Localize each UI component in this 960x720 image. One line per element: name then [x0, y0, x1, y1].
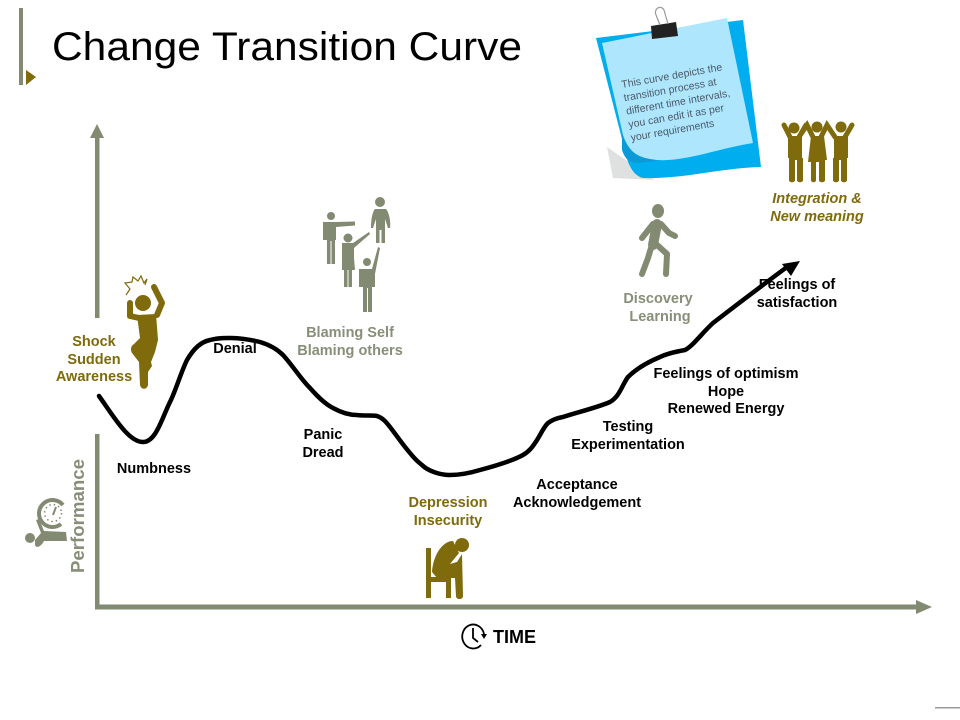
axis label: Performance: Performance: [68, 459, 88, 573]
label: Feelings of optimism: Renewed Energy: [668, 401, 784, 417]
label: Testing: [571, 419, 685, 453]
icon: clock: [462, 624, 487, 648]
label: Blaming: Blaming others: [297, 343, 403, 359]
note shadow: [607, 147, 655, 180]
label: Integration: [770, 191, 864, 225]
label: Depression: Insecurity: [414, 513, 482, 529]
axis label: TIME: TIME: [493, 627, 536, 647]
label: Feelings of satisfaction: [757, 277, 837, 311]
label: Testing: Testing: [603, 419, 653, 435]
label: Feelings of satisfaction: Feelings of: [759, 277, 835, 293]
note text: your requirements: [630, 118, 715, 144]
label: Acceptance: Acknowledgement: [513, 495, 641, 511]
icon: walking person: [642, 204, 675, 274]
note text: different time intervals,: [625, 87, 731, 118]
label: Numbness: Numbness: [117, 461, 191, 477]
label: Discovery: Learning: [629, 309, 691, 325]
label: Discovery: [623, 291, 693, 325]
label: Feelings of satisfaction: satisfaction: [757, 295, 837, 311]
label: Feelings of optimism: Hope: [708, 384, 744, 400]
title accent bar and marker: [19, 8, 36, 85]
label: Shock: Sudden: [67, 352, 121, 368]
label: Feelings of optimism: Feelings of optimism: [653, 366, 799, 382]
note text: [620, 61, 736, 144]
label: Testing: Experimentation: [571, 437, 685, 453]
note back sheet: [596, 20, 761, 178]
label: Panic Dread: [302, 427, 344, 461]
label: Shock: [56, 334, 132, 385]
label: Denial: Denial: [213, 341, 257, 357]
label: Blaming: Blaming Self: [306, 325, 394, 341]
note front sheet: [602, 18, 753, 160]
icon: person with clock: [25, 500, 67, 547]
label: Shock: Shock: [72, 334, 117, 350]
label: Feelings of optimism: [653, 366, 799, 417]
footer mark: [935, 707, 960, 708]
label: Blaming: [297, 325, 403, 359]
vertical axis: [90, 124, 104, 609]
label: Integration: New meaning: [770, 209, 864, 225]
performance curve: [99, 261, 800, 475]
label: Discovery: Discovery: [623, 291, 693, 307]
label: Depression: Depression: [409, 495, 487, 511]
label: Panic Dread: Dread: [302, 445, 344, 461]
icon: blaming people: [323, 197, 390, 312]
note fold shade: [622, 135, 660, 163]
label: Integration: Integration &: [772, 191, 862, 207]
sticky note: [596, 7, 761, 180]
binder clip: [651, 7, 678, 39]
note text: transition process at: [623, 76, 717, 104]
horizontal axis: [95, 600, 932, 614]
label: Acceptance: Acceptance: [536, 477, 618, 493]
icon: three people cheering: [784, 122, 852, 182]
note text: you can edit it as per: [627, 102, 725, 131]
label: Shock: Awareness: [56, 369, 132, 385]
icon: shocked person: [125, 276, 162, 389]
icon: seated depressed person: [426, 538, 469, 599]
label: Depression: [409, 495, 487, 529]
title: Change Transition Curve: [52, 25, 522, 69]
label: Panic Dread: Panic: [304, 427, 342, 443]
note text: This curve depicts the: [620, 61, 723, 91]
label: Acceptance: [513, 477, 641, 511]
